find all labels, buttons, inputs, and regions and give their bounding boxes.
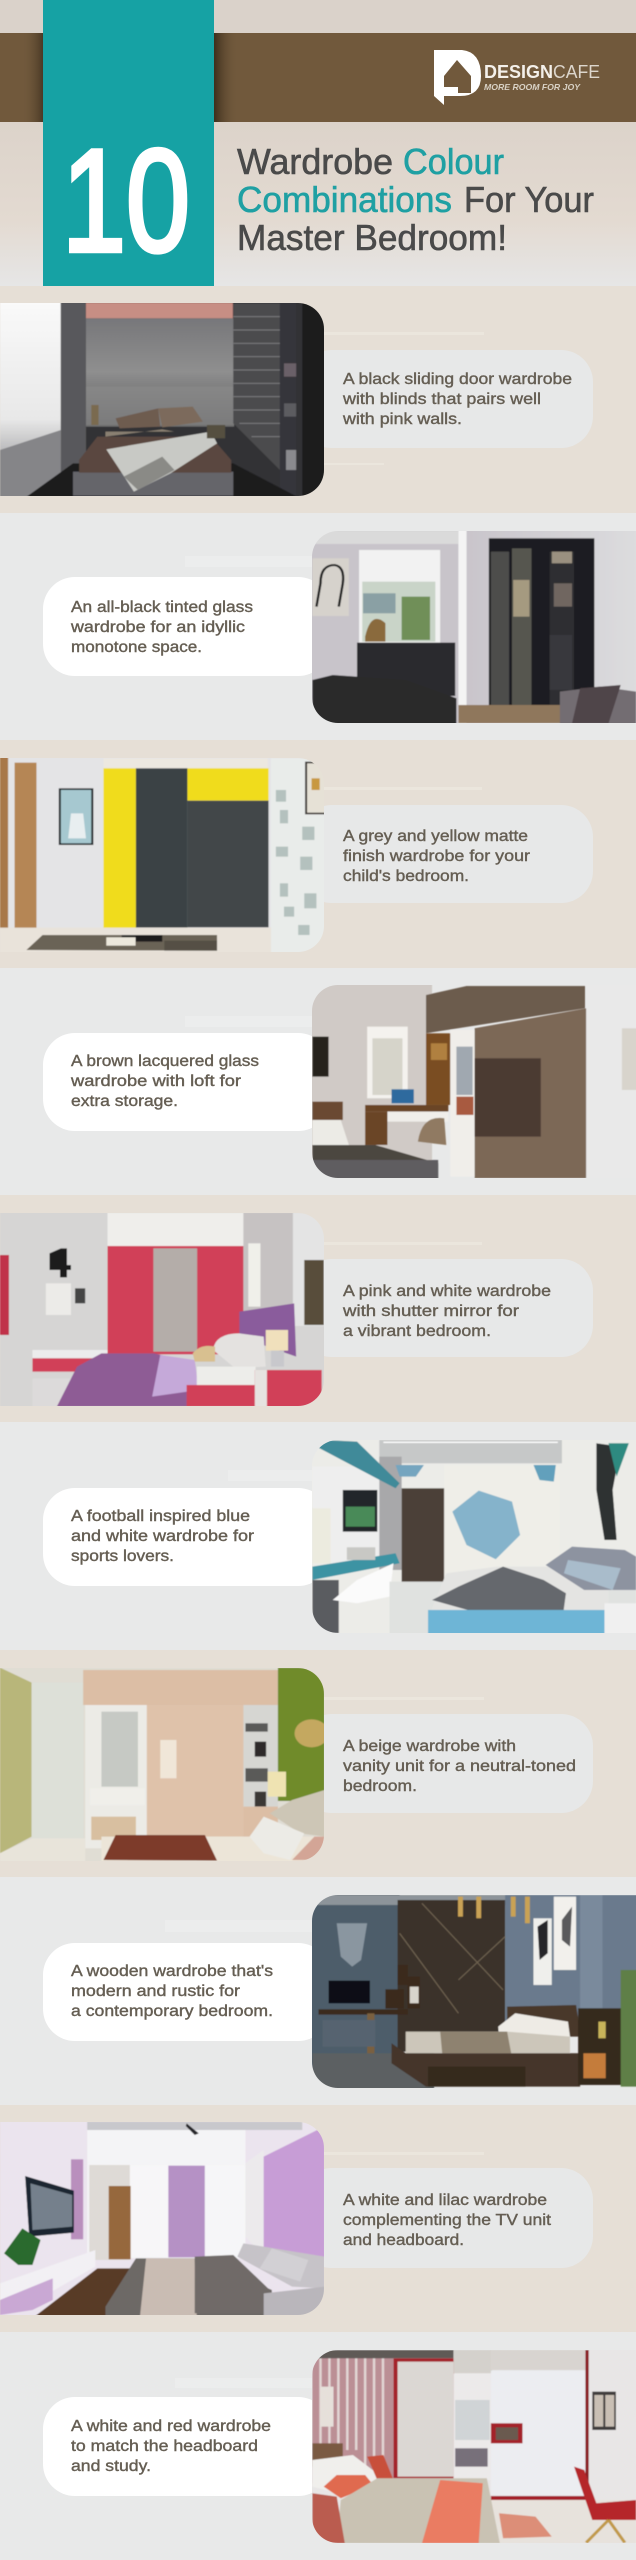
panel 9: white and lilac wardrobe — [0, 2120, 593, 2318]
panel 8: wooden wardrobe — [43, 1893, 636, 2090]
logo: Design Cafe — [434, 50, 600, 105]
panel 1: black sliding door wardrobe — [0, 300, 593, 498]
brown logo band — [0, 33, 636, 122]
caption 3: finish wardrobe for your — [343, 848, 531, 865]
caption 9: complementing the TV unit — [343, 2212, 552, 2229]
caption 6: and white wardrobe for — [71, 1528, 255, 1545]
caption 6: sports lovers. — [71, 1548, 174, 1565]
caption 7: A beige wardrobe with — [343, 1738, 516, 1755]
caption 2: monotone space. — [71, 639, 202, 656]
caption 8: a contemporary bedroom. — [71, 2003, 273, 2020]
header background — [0, 0, 636, 286]
teal number block — [43, 0, 214, 286]
photo 9: lilac headboard bedroom — [0, 2120, 329, 2318]
title: Wardrobe — [237, 141, 393, 182]
caption 6: A football inspired blue — [71, 1508, 250, 1525]
caption 5 — [300, 1259, 593, 1357]
caption 5: a vibrant bedroom. — [343, 1323, 491, 1340]
caption 2: wardrobe for an idyllic — [70, 619, 245, 636]
title: Combinations — [237, 179, 452, 220]
panel 5: pink and white wardrobe — [0, 1210, 593, 1408]
caption 8 — [43, 1943, 330, 2041]
teal number block: 10 — [62, 119, 190, 282]
photo 2: black glass wardrobe bedroom — [310, 528, 636, 727]
photo 1: dark bedroom — [0, 300, 329, 498]
caption 9: and headboard. — [343, 2232, 464, 2249]
caption 7 — [300, 1714, 593, 1813]
caption 9 — [300, 2168, 593, 2268]
photo 6: football themed bedroom — [310, 1438, 636, 1637]
logo: Design Cafe: CAFE — [553, 62, 600, 82]
photo 3: yellow and grey wardrobe — [0, 756, 329, 955]
photo 8: wooden wardrobe with blue walls — [310, 1893, 636, 2090]
photo 5: pink wardrobe and purple bed — [0, 1210, 329, 1408]
caption 5: with shutter mirror for — [342, 1303, 520, 1320]
panel 6: football inspired blue and white wardrobe — [43, 1438, 636, 1637]
caption 6 — [43, 1488, 330, 1586]
caption 10: to match the headboard — [71, 2438, 258, 2455]
caption 1: with blinds that pairs well — [342, 391, 541, 408]
logo: Design Cafe: MORE ROOM FOR JOY — [484, 82, 581, 92]
caption 5: A pink and white wardrobe — [343, 1283, 551, 1300]
title: Colour — [403, 141, 504, 182]
panel 7: beige wardrobe with vanity unit — [0, 1665, 593, 1863]
caption 4: A brown lacquered glass — [71, 1053, 259, 1070]
logo: Design Cafe: DESIGN — [484, 62, 553, 82]
caption 4 — [43, 1033, 330, 1131]
caption 10: A white and red wardrobe — [71, 2418, 271, 2435]
caption 3: child's bedroom. — [343, 868, 469, 885]
panel 3: grey and yellow matte wardrobe — [0, 756, 593, 955]
photo 4: brown wardrobe with loft — [310, 983, 636, 1182]
caption 1: A black sliding door wardrobe — [343, 371, 572, 388]
photo 7: beige wardrobe — [0, 1665, 329, 1863]
caption 2: An all-black tinted glass — [71, 599, 253, 616]
caption 1: with pink walls. — [342, 411, 462, 428]
title: Master Bedroom! — [237, 217, 507, 258]
caption 3 — [300, 805, 593, 903]
caption 1 — [300, 350, 593, 448]
caption 2 — [43, 577, 330, 676]
caption 7: bedroom. — [343, 1778, 417, 1795]
title: For Your — [464, 179, 594, 220]
caption 4: extra storage. — [71, 1093, 178, 1110]
caption 8: modern and rustic for — [71, 1983, 241, 2000]
photo 10: red and white wardrobe bedroom — [310, 2348, 636, 2545]
caption 7: vanity unit for a neutral-toned — [343, 1758, 576, 1775]
panel 2: all-black tinted glass wardrobe — [43, 528, 636, 727]
title — [237, 141, 594, 258]
caption 4: wardrobe with loft for — [70, 1073, 242, 1090]
caption 10 — [43, 2397, 330, 2496]
caption 8: A wooden wardrobe that's — [71, 1963, 273, 1980]
caption 10: and study. — [71, 2458, 151, 2475]
panel 4: brown lacquered glass wardrobe — [43, 983, 636, 1182]
caption 3: A grey and yellow matte — [343, 828, 528, 845]
caption 9: A white and lilac wardrobe — [343, 2192, 547, 2209]
panel 10: white and red wardrobe — [43, 2348, 636, 2545]
